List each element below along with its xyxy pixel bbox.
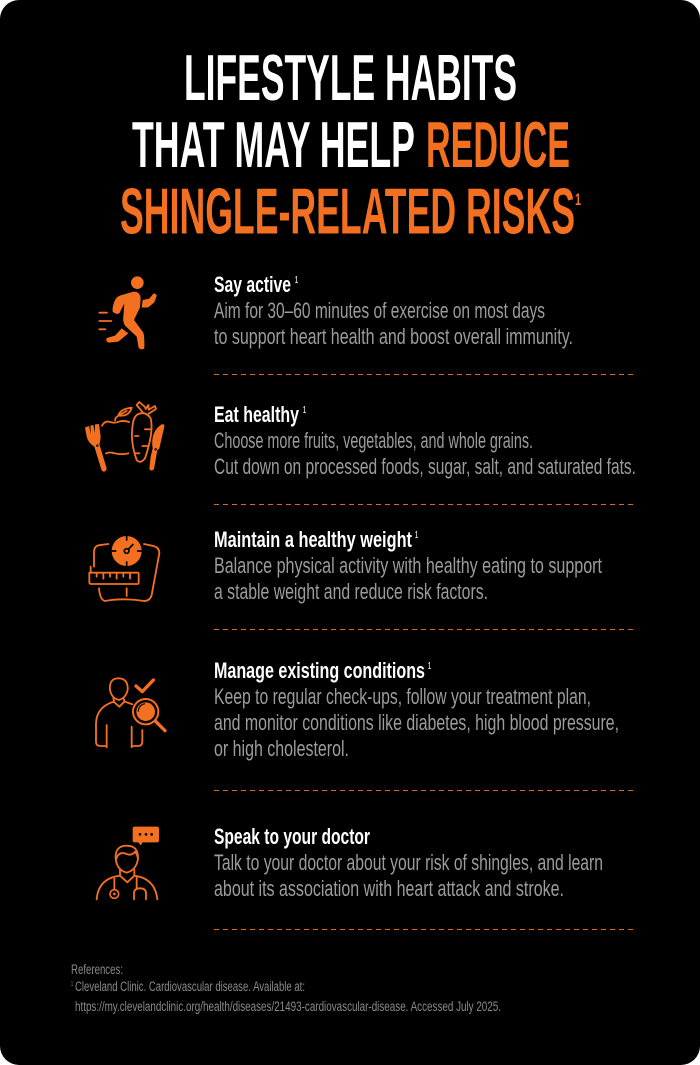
references: https://my.clevelandclinic.org/health/diseases/21493-cardiovascular-disease. Accessed July 2025.: [75, 999, 501, 1014]
icon: weighing scale and measuring tape: [89, 536, 159, 601]
icon: food, apple, carrot and cutlery: [85, 402, 164, 472]
title: REDUCE: [426, 108, 570, 181]
text block: say active: [214, 272, 573, 349]
references: Cleveland Clinic. Cardiovascular disease. Available at:: [75, 979, 305, 994]
text block: maintain a healthy weight: Maintain a healthy weight: [214, 527, 412, 552]
text block: say active: 1: [295, 275, 298, 286]
text block: eat healthy: Choose more fruits, vegetables, and whole grains.: [214, 428, 533, 453]
text block: maintain a healthy weight: a stable weight and reduce risk factors.: [214, 579, 488, 604]
references: References:: [71, 962, 123, 977]
title: 1: [575, 190, 581, 209]
text block: speak to your doctor: Speak to your doctor: [214, 824, 370, 849]
text block: say active: Say active: [214, 272, 291, 297]
text block: eat healthy: 1: [303, 405, 306, 416]
text block: manage existing conditions: 1: [428, 661, 431, 672]
text block: speak to your doctor: [214, 824, 603, 901]
icon: running person: [99, 276, 157, 349]
icon: doctor with speech bubble: [97, 827, 159, 899]
text block: say active: Aim for 30–60 minutes of exercise on most days: [214, 298, 545, 323]
references: 1: [71, 981, 73, 988]
text block: eat healthy: Eat healthy: [214, 402, 300, 427]
text block: manage existing conditions: [214, 658, 619, 761]
text block: manage existing conditions: Manage existing conditions: [214, 658, 425, 683]
icon: person with magnifier and check mark: [96, 678, 165, 747]
references: [71, 962, 501, 1014]
text block: speak to your doctor: about its association with heart attack and stroke.: [214, 876, 564, 901]
text block: eat healthy: [214, 402, 636, 479]
title: [120, 41, 581, 248]
text block: maintain a healthy weight: [214, 527, 603, 604]
text block: maintain a healthy weight: 1: [415, 530, 418, 541]
title: THAT MAY HELP: [132, 108, 415, 181]
text block: manage existing conditions: or high cholesterol.: [214, 736, 349, 761]
